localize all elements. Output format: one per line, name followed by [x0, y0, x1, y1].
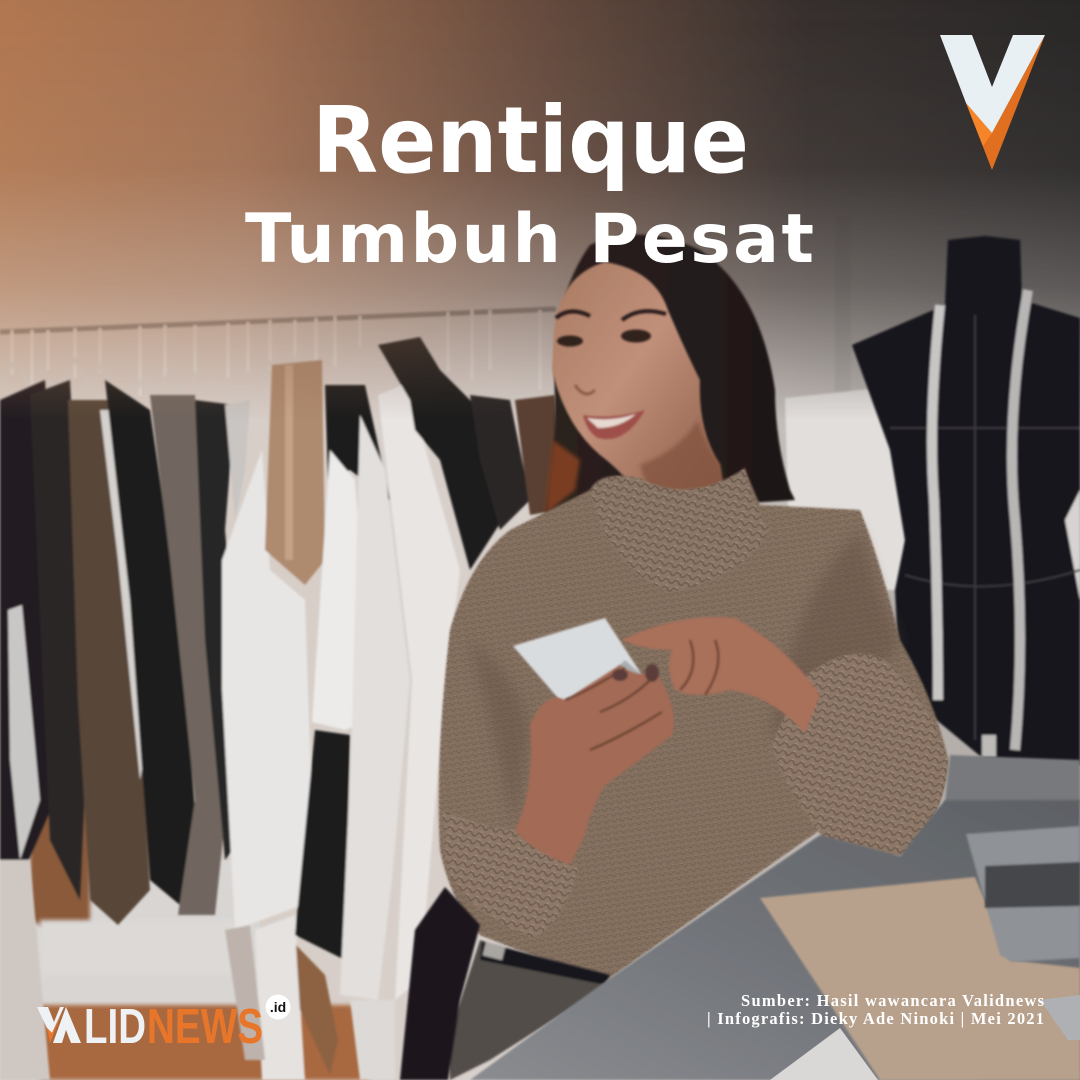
facial features — [556, 311, 666, 439]
logo: Validnews.id: LID — [84, 1000, 146, 1054]
laptop — [966, 826, 1080, 962]
face and neck — [552, 262, 725, 500]
title: Rentique — [312, 87, 749, 194]
title: Tumbuh Pesat — [245, 200, 814, 279]
title — [245, 87, 814, 279]
photo: white dressmaking panel — [785, 388, 905, 590]
source credit: Sumber: Hasil wawancara Validnews — [741, 991, 1045, 1010]
office chair — [400, 887, 480, 1080]
woman — [439, 235, 948, 1080]
paper sheet — [760, 877, 1080, 1080]
desk — [470, 755, 1080, 1080]
document corner — [1040, 995, 1080, 1040]
source credit: | Infografis: Dieky Ade Ninoki | Mei 2021 — [707, 1009, 1044, 1028]
logo: Validnews.id: NEWS — [147, 1000, 263, 1054]
turtleneck collar — [590, 468, 770, 592]
trousers and belt — [448, 940, 610, 1080]
photo: clothes rail with hangers — [0, 309, 556, 415]
logo: V mark — [940, 35, 1045, 170]
logo: Validnews.id — [37, 994, 290, 1054]
sleeve shading — [470, 640, 530, 830]
source credit — [707, 991, 1045, 1028]
left arm cuff — [442, 810, 578, 938]
sweater shading — [770, 530, 900, 740]
top colour gradient overlay — [0, 0, 1080, 420]
photo: hanging clothes — [0, 337, 560, 1080]
logo: Validnews.id: .id — [270, 999, 286, 1015]
hair — [545, 235, 795, 515]
photo: mannequin with measuring tape — [852, 236, 1080, 765]
white triangle corner — [770, 1028, 878, 1080]
right hand — [622, 617, 820, 733]
phone — [513, 618, 642, 720]
reddish hair strand — [545, 440, 580, 515]
left hand — [515, 664, 674, 865]
right arm cuff — [772, 653, 948, 855]
sweater body — [439, 470, 948, 978]
neck shadow — [640, 420, 725, 500]
